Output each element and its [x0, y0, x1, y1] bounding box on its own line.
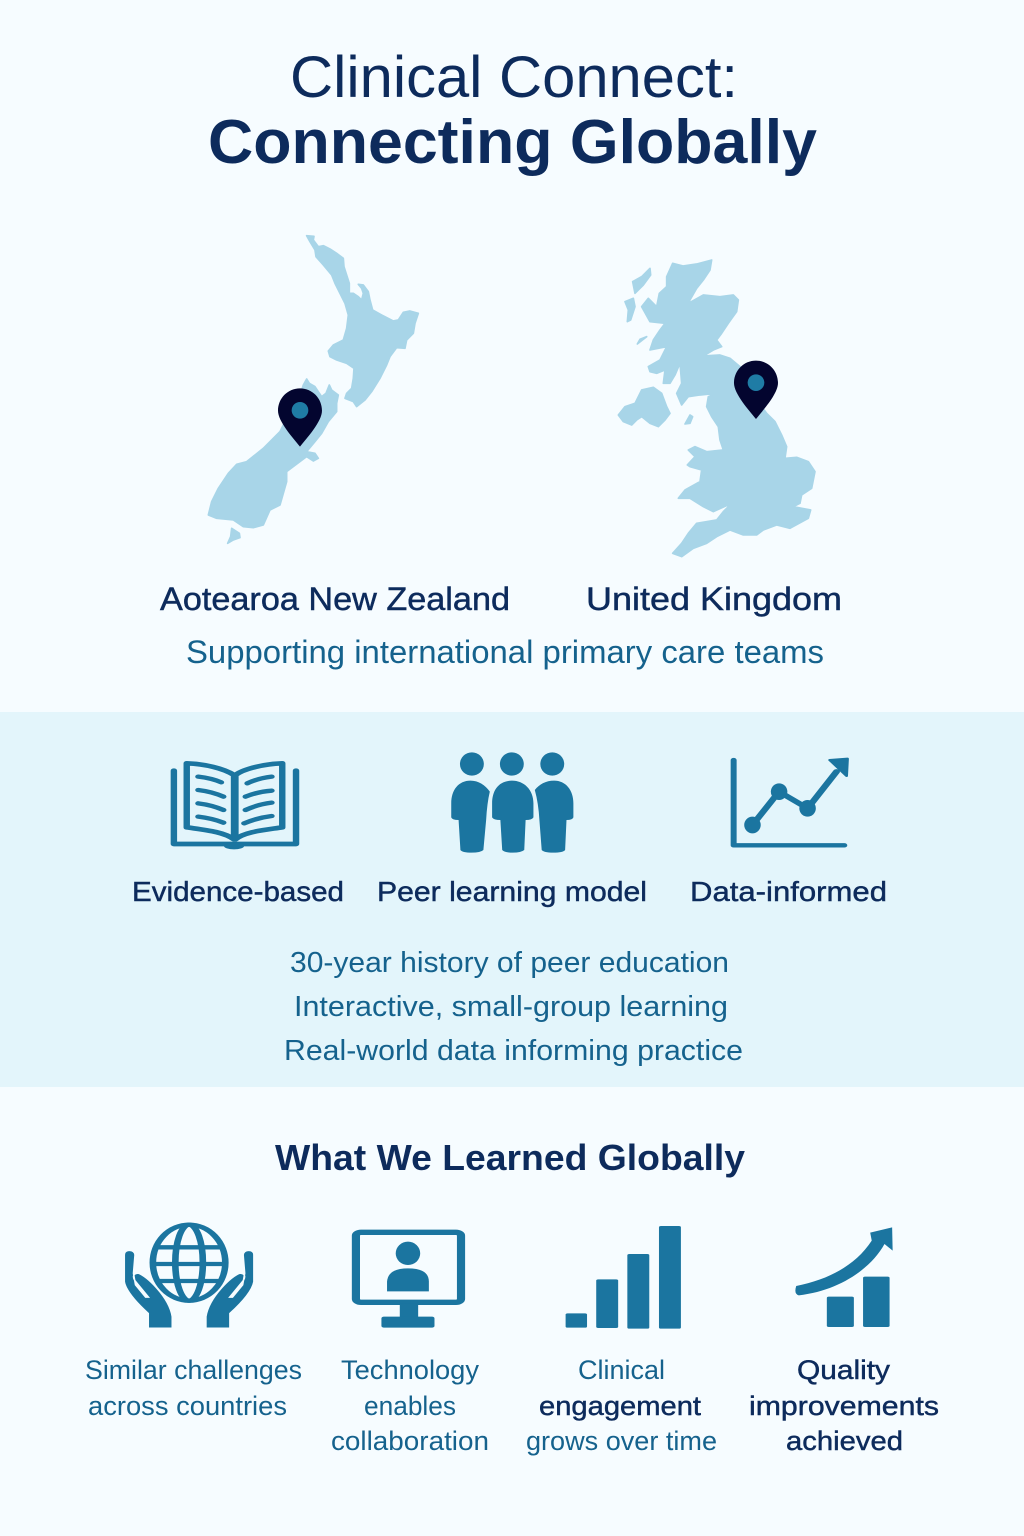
text: similar challenges: Similar challenges [85, 1355, 302, 1385]
label: Evidence-based: Evidence-based [132, 876, 344, 907]
text: technology enables collaboration: Technology [341, 1355, 479, 1385]
label: Peer learning model: Peer learning model [377, 876, 647, 907]
text: similar challenges: across countries [88, 1391, 287, 1421]
map pin: New Zealand [278, 388, 322, 447]
Isle of Man [685, 415, 693, 424]
title [208, 45, 818, 177]
Northern Ireland [618, 387, 670, 427]
label: Data-informed: Data-informed [690, 876, 887, 907]
text: technology enables collaboration: collaboration [331, 1426, 489, 1456]
icon: three people [451, 752, 573, 853]
Outer Hebrides [625, 268, 651, 344]
icon: improvement arrow with bars [795, 1227, 893, 1327]
title: Clinical Connect: [290, 45, 738, 110]
text block: programme features: 30-year history of peer education [290, 947, 729, 979]
text: quality improvements: achieved [786, 1426, 903, 1456]
text: quality improvements: improvements [749, 1391, 939, 1421]
text: technology enables collaboration: enables [364, 1391, 456, 1421]
North Island [307, 236, 418, 407]
text block: programme features: Real-world data informing practice [284, 1035, 743, 1067]
panel: approach band [0, 712, 1024, 1087]
map: Aotearoa New Zealand [208, 236, 418, 543]
South Island [208, 379, 338, 528]
map pin: United Kingdom [734, 361, 778, 419]
text: quality improvements: Quality [797, 1355, 891, 1385]
heading: What We Learned Globally: What We Learned Globally [275, 1137, 745, 1178]
map: United Kingdom [618, 260, 815, 557]
text: similar challenges [85, 1355, 302, 1421]
text: clinical engagement: grows over time [526, 1426, 717, 1456]
label: Aotearoa New Zealand: Aotearoa New Zealand [160, 581, 510, 617]
text block: programme features: Interactive, small-group learning [294, 991, 728, 1023]
text: quality improvements [749, 1355, 939, 1456]
Great Britain [642, 260, 815, 557]
title: Connecting Globally [208, 108, 818, 177]
icon: video call monitor [356, 1232, 461, 1328]
icon: rising bars [566, 1226, 681, 1329]
text: clinical engagement [526, 1355, 717, 1456]
label: United Kingdom: United Kingdom [586, 581, 842, 617]
text: clinical engagement: engagement [539, 1391, 702, 1421]
icon: open book [174, 763, 296, 849]
subtitle: Supporting international primary care teams [186, 634, 824, 670]
icon: globe in hands [124, 1225, 254, 1328]
Stewart Island [228, 528, 240, 543]
text: technology enables collaboration [331, 1355, 489, 1456]
text block: programme features [284, 947, 743, 1067]
text: clinical engagement: Clinical [578, 1355, 665, 1385]
icon: line chart [734, 759, 848, 845]
